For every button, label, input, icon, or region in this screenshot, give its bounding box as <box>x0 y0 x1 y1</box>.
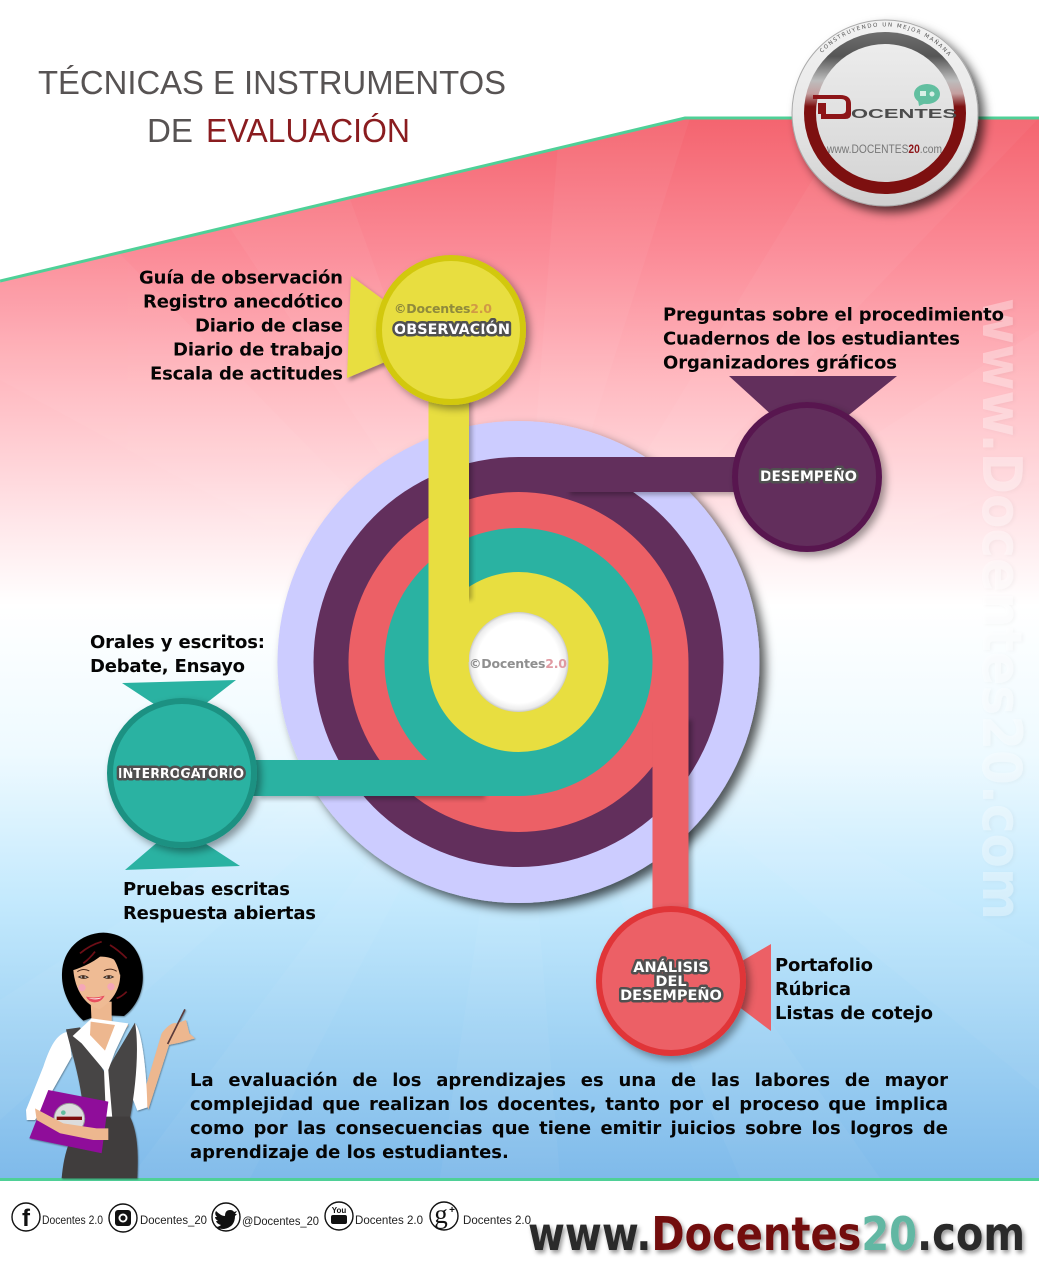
list: desempeño <box>663 304 1004 374</box>
list: análisis <box>775 955 933 1024</box>
paragraph: complejidad que realizan los docentes, tanto por el proceso que implica <box>190 1094 948 1115</box>
youtube: You <box>332 1206 346 1215</box>
neck <box>83 1002 128 1057</box>
google plus <box>430 1199 531 1230</box>
list: observación: Escala de actitudes <box>150 364 343 384</box>
right sleeve <box>131 1023 147 1111</box>
pointer <box>730 944 771 1031</box>
list: interrogatorio bottom: Pruebas escritas <box>123 879 290 900</box>
brows <box>77 969 117 972</box>
vest <box>66 1023 137 1120</box>
node circle <box>599 909 743 1053</box>
label: INTERROGATORIO <box>118 767 244 782</box>
connector shadows <box>260 400 735 910</box>
hand <box>162 1020 195 1045</box>
list: análisis: Rúbrica <box>775 979 851 1000</box>
list: interrogatorio top: Debate, Ensayo <box>90 656 245 677</box>
google plus: + <box>449 1205 455 1216</box>
facebook: Docentes 2.0 <box>42 1213 103 1227</box>
instagram: Docentes_20 <box>140 1213 207 1227</box>
eyes <box>79 976 113 978</box>
node circle <box>379 258 523 402</box>
title <box>38 64 506 149</box>
mouth <box>86 996 105 1002</box>
logo chat bubble <box>914 84 940 106</box>
list: interrogatorio bottom: Respuesta abiertas <box>123 903 316 924</box>
skirt <box>62 1117 138 1178</box>
label: DESEMPEÑO <box>620 987 722 1004</box>
cheeks <box>78 984 86 991</box>
list: análisis: Listas de cotejo <box>775 1003 933 1024</box>
forearm <box>35 1108 108 1140</box>
center watermark: ©Docentes2.0 <box>469 656 567 671</box>
paragraph <box>190 1070 948 1163</box>
right arm <box>143 1033 169 1109</box>
pointer bottom <box>125 840 240 870</box>
facebook: f <box>22 1205 31 1232</box>
list: interrogatorio top <box>90 632 265 677</box>
watermark: vertical site address: www.Docentes20.com <box>970 298 1033 920</box>
paragraph: La evaluación de los aprendizajes es una de las labores de mayor <box>190 1070 948 1091</box>
logo wordmark: OCENTES <box>851 106 958 121</box>
node: observación <box>347 258 523 402</box>
logo url: www.DOCENTES20.com <box>826 144 942 156</box>
ring: purple <box>314 457 724 867</box>
folder <box>29 1090 108 1153</box>
pen <box>168 1009 185 1044</box>
pointer <box>729 376 897 418</box>
badge on folder <box>54 1103 85 1134</box>
logo wordmark <box>813 95 958 121</box>
footer website url: www.Docentes20.com <box>528 1207 1025 1261</box>
list: observación: Diario de clase <box>195 316 343 336</box>
connector: purple <box>518 457 737 492</box>
list: observación: Guía de observación <box>139 268 343 288</box>
google plus: Docentes 2.0 <box>463 1213 531 1227</box>
connector: red <box>652 662 688 912</box>
ring: lavender <box>278 421 760 903</box>
left sleeve <box>26 1032 72 1120</box>
node circle <box>735 405 879 549</box>
title: TÉCNICAS E INSTRUMENTOS <box>38 64 506 101</box>
title: EVALUACIÓN <box>206 112 410 149</box>
skin v-neck <box>90 1022 115 1051</box>
list: interrogatorio top: Orales y escritos: <box>90 632 265 653</box>
list: desempeño: Organizadores gráficos <box>663 352 897 374</box>
logo badge <box>790 18 992 220</box>
pointer top <box>122 680 236 708</box>
list: observación: Diario de trabajo <box>173 340 343 360</box>
youtube: Docentes 2.0 <box>355 1213 423 1227</box>
node: análisis del desempeño <box>599 909 771 1053</box>
teacher illustration <box>26 933 195 1178</box>
instagram <box>109 1204 207 1232</box>
connector: yellow <box>428 395 469 662</box>
node: desempeño <box>729 376 897 549</box>
paragraph: aprendizaje de los estudiantes. <box>190 1142 509 1163</box>
list: observación <box>139 268 343 384</box>
label <box>620 959 722 1004</box>
hair fringe <box>72 938 132 975</box>
hair back <box>62 933 143 1021</box>
node: interrogatorio <box>110 680 254 870</box>
title: DE <box>147 112 193 149</box>
watermark: ©Docentes2.0 <box>394 301 492 316</box>
twitter <box>212 1203 319 1231</box>
facebook <box>12 1203 103 1232</box>
node circle <box>110 701 254 845</box>
paragraph: como por las consecuencias que tiene emitir juicios sobre los logros de <box>190 1118 948 1139</box>
list: desempeño: Preguntas sobre el procedimiento <box>663 304 1004 326</box>
face <box>73 957 120 1009</box>
youtube <box>325 1202 423 1230</box>
list: observación: Registro anecdótico <box>143 292 343 312</box>
label: DEL <box>655 974 687 990</box>
twitter: @Docentes_20 <box>242 1214 319 1228</box>
label: DESEMPEÑO <box>760 468 857 485</box>
connector: teal <box>250 760 518 796</box>
pointer <box>347 276 385 378</box>
label: OBSERVACIÓN <box>394 320 510 338</box>
google plus: g <box>434 1199 448 1229</box>
footer social links <box>12 1199 531 1232</box>
ring: yellow <box>428 572 608 752</box>
target rings <box>278 421 760 903</box>
ring: teal <box>384 528 652 796</box>
hair highlights <box>80 942 127 998</box>
center hole <box>468 612 568 712</box>
ring: red <box>348 492 688 832</box>
list: desempeño: Cuadernos de los estudiantes <box>663 328 960 350</box>
label: ANÁLISIS <box>633 959 709 976</box>
shirt <box>73 1018 128 1118</box>
list: interrogatorio bottom <box>123 879 316 924</box>
list: análisis: Portafolio <box>775 955 873 976</box>
